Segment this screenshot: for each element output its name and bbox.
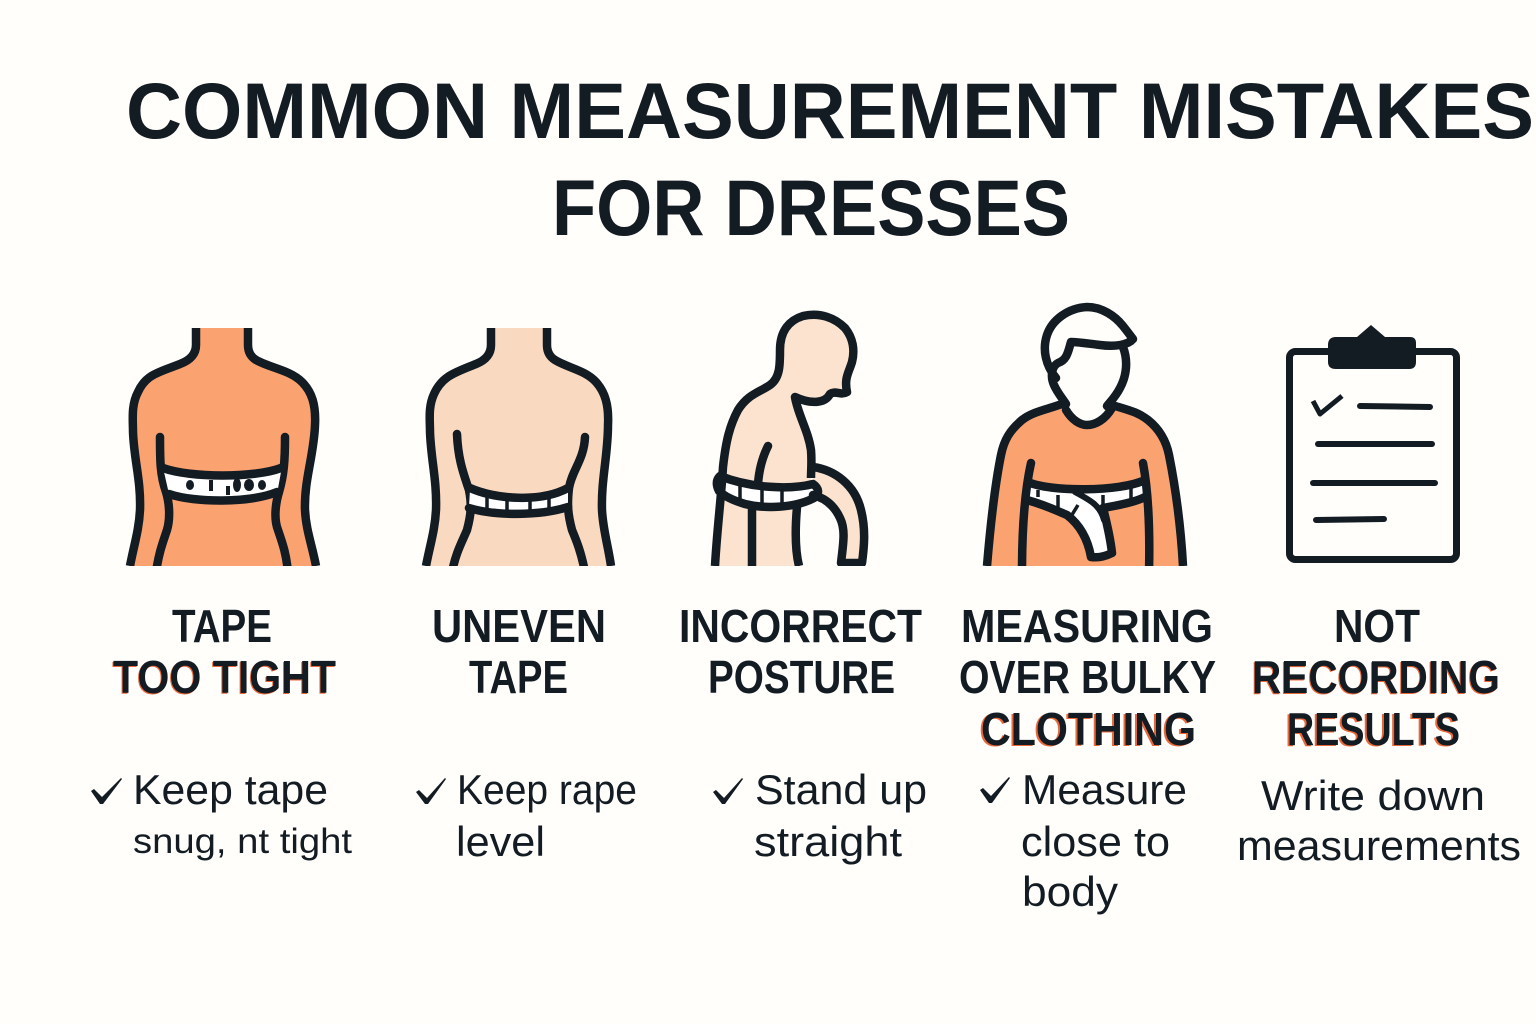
heading: tape too tight: TAPE bbox=[172, 600, 272, 652]
panel: incorrect posture bbox=[679, 315, 927, 865]
tip: keep tape level: Keep rape bbox=[457, 766, 637, 813]
tip: measure close to body bbox=[980, 766, 1187, 915]
tip: stand up straight: straight bbox=[754, 818, 902, 865]
heading: not recording results: NOT bbox=[1334, 600, 1420, 652]
tip: write down measurements: measurements bbox=[1237, 822, 1521, 869]
heading: incorrect posture: POSTURE bbox=[708, 651, 895, 703]
panel: tape too tight bbox=[91, 328, 352, 861]
heading: incorrect posture: INCORRECT bbox=[679, 600, 922, 652]
tip: write down measurements: Write down bbox=[1261, 772, 1485, 819]
title bbox=[126, 66, 1534, 252]
tip: measure close to body: close to bbox=[1021, 818, 1170, 865]
icon: person in sweater with tape bbox=[987, 307, 1183, 572]
panel: not recording results bbox=[1237, 325, 1521, 869]
tip: keep tape snug: snug, nt tight bbox=[133, 822, 352, 861]
title: FOR DRESSES bbox=[552, 163, 1070, 252]
tip: measure close to body: body bbox=[1022, 868, 1118, 915]
icon: bent figure with tape bbox=[715, 315, 864, 566]
heading: incorrect posture bbox=[679, 600, 922, 703]
panel: uneven tape bbox=[416, 328, 637, 865]
heading: measuring over bulky clothing: CLOTHING bbox=[981, 703, 1196, 755]
tip: keep tape level bbox=[416, 766, 637, 865]
icon: torso with tight tape bbox=[130, 328, 316, 572]
tip: keep tape level: level bbox=[456, 818, 545, 865]
icon: clipboard checklist bbox=[1290, 325, 1456, 560]
heading: tape too tight: TOO TIGHT bbox=[113, 651, 336, 703]
heading: uneven tape bbox=[432, 600, 606, 703]
heading: measuring over bulky clothing bbox=[959, 600, 1216, 755]
panel: measuring over bulky clothing bbox=[959, 307, 1216, 915]
heading: not recording results bbox=[1252, 600, 1500, 755]
icon: torso with uneven tape bbox=[426, 328, 611, 572]
heading: uneven tape: TAPE bbox=[469, 651, 568, 703]
tip: measure close to body: Measure bbox=[1022, 766, 1187, 813]
heading: not recording results: RECORDING bbox=[1252, 651, 1500, 703]
heading: tape too tight bbox=[113, 600, 336, 703]
heading: not recording results: RESULTS bbox=[1287, 703, 1460, 755]
tip: keep tape snug bbox=[91, 766, 352, 861]
tip: write down measurements bbox=[1237, 772, 1521, 869]
tip: stand up straight: Stand up bbox=[755, 766, 927, 813]
tip: stand up straight bbox=[713, 766, 927, 865]
title: COMMON MEASUREMENT MISTAKES bbox=[126, 66, 1534, 155]
heading: measuring over bulky clothing: OVER BULKY bbox=[959, 651, 1216, 703]
heading: uneven tape: UNEVEN bbox=[432, 600, 606, 652]
tip: keep tape snug: Keep tape bbox=[133, 766, 328, 813]
heading: measuring over bulky clothing: MEASURING bbox=[961, 600, 1213, 652]
